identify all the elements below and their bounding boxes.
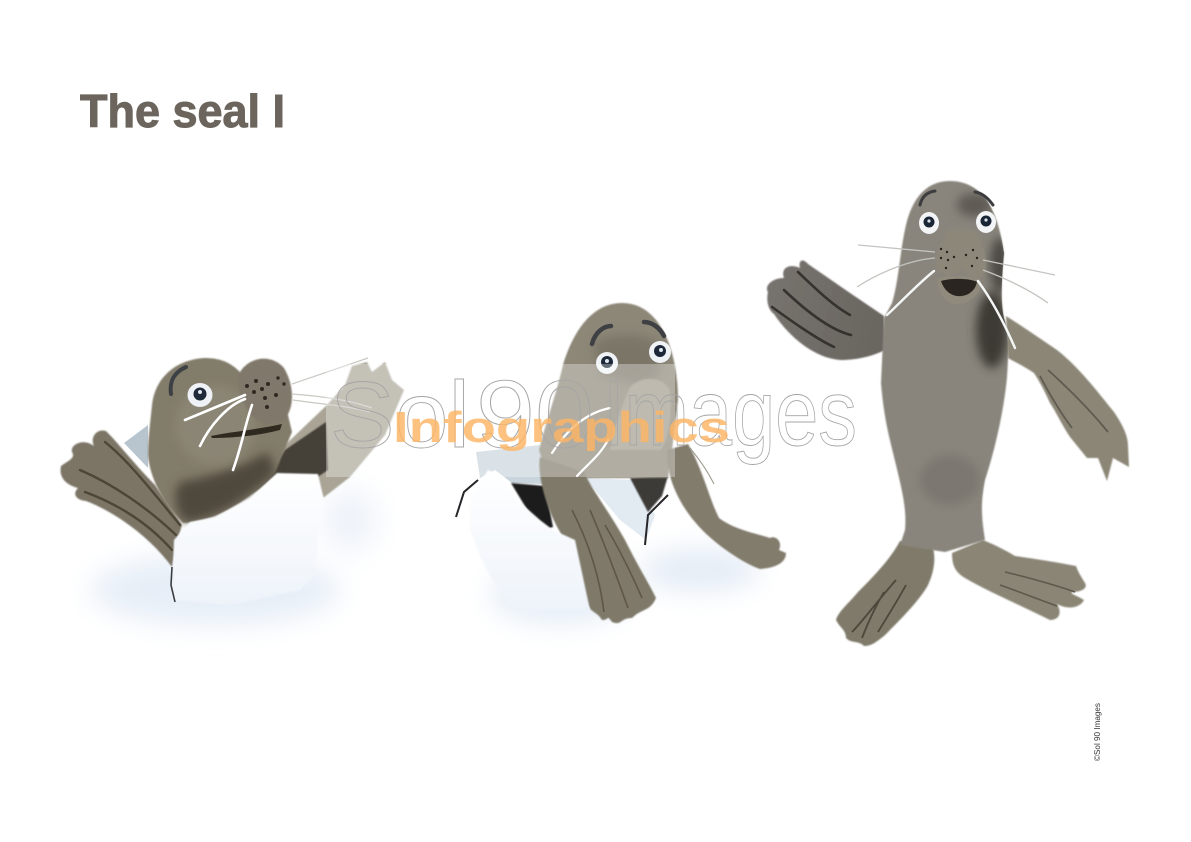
watermark: Sol 90 Images: Images	[603, 360, 857, 465]
hole behind seal: left	[124, 425, 148, 468]
right foot grooves	[1000, 572, 1075, 606]
flipper finger grooves	[80, 442, 180, 550]
watermark: Sol 90 Images: 90	[476, 361, 594, 468]
muzzle	[936, 228, 986, 279]
body and head	[148, 358, 292, 523]
left flipper	[539, 457, 656, 623]
watermark: Sol 90 Images: Sol	[330, 362, 470, 467]
copyright credit: ©Sol 90 Images	[1093, 703, 1102, 761]
head and body	[539, 303, 678, 480]
mouth line	[211, 424, 282, 438]
snow shadow: left	[90, 488, 378, 625]
face shading	[593, 335, 660, 385]
left flipper grooves	[572, 510, 642, 612]
watermark band	[326, 364, 675, 477]
thick whiskers	[887, 271, 1015, 348]
seal emerging sideways from torn snow	[61, 358, 404, 625]
watermark: Sol 90 Images	[330, 360, 857, 468]
thin whiskers	[292, 358, 372, 412]
back flipper shadow	[255, 422, 328, 492]
eye	[188, 383, 212, 407]
left flipper grooves	[772, 272, 851, 347]
torso shadow	[630, 476, 668, 512]
head highlight	[175, 385, 255, 465]
left foot	[836, 541, 934, 646]
left flipper raised	[767, 261, 885, 360]
right foot	[952, 540, 1086, 620]
right flipper	[667, 444, 786, 569]
body shading	[920, 193, 1010, 505]
centre whiskers	[552, 408, 610, 476]
snow shadow: centre	[490, 550, 760, 623]
whiskers	[185, 395, 252, 470]
right flipper	[1006, 316, 1129, 481]
muzzle dots	[940, 248, 978, 269]
tear crack	[171, 567, 175, 602]
torn snow flap	[172, 473, 324, 605]
mouth opening	[941, 279, 977, 296]
brows	[592, 322, 664, 344]
eyebrow	[171, 367, 186, 394]
body and head	[881, 181, 1008, 552]
snout	[610, 379, 671, 450]
dark hole left	[511, 483, 553, 531]
seal emerging upright from torn snow	[456, 303, 786, 623]
front flipper	[61, 430, 182, 567]
back flipper	[250, 362, 404, 498]
muzzle dots	[245, 376, 286, 409]
cracks	[456, 480, 668, 545]
hole interior: left	[476, 445, 545, 484]
hole interior: right	[585, 478, 655, 540]
eyes	[596, 341, 671, 374]
title: The seal I	[80, 85, 285, 137]
right flipper grooves	[1040, 370, 1108, 432]
standing seal	[767, 181, 1129, 646]
torn snow front	[470, 470, 590, 612]
muzzle	[238, 359, 292, 424]
left foot grooves	[852, 580, 906, 638]
belly shadow	[175, 452, 276, 522]
brows	[920, 191, 993, 205]
whiskers	[857, 245, 1055, 303]
infographic canvas	[60, 93, 1130, 761]
mouth	[937, 276, 981, 304]
watermark: Infographics: Infographics	[393, 403, 730, 452]
eyes	[919, 211, 996, 234]
thin whisker right	[690, 448, 714, 484]
